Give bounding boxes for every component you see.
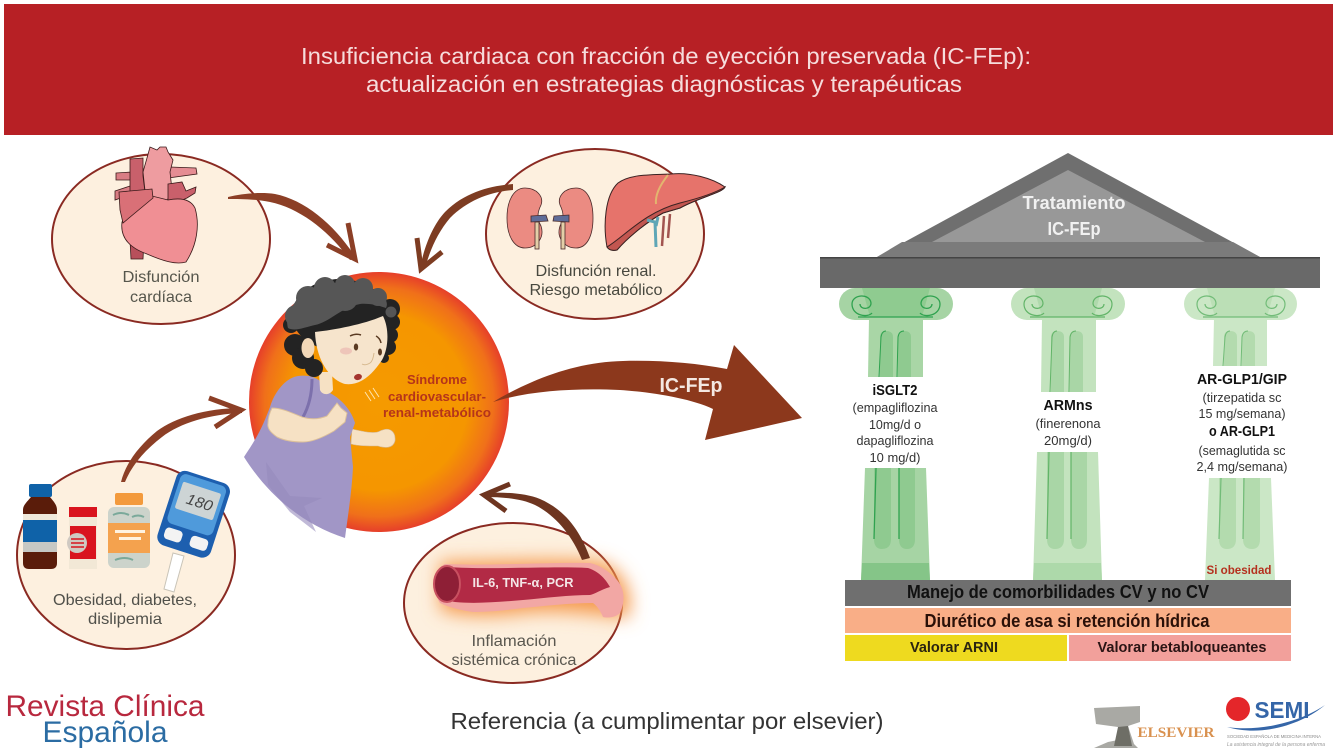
logo: Revista Clínica Española: Española xyxy=(42,716,168,749)
central circle: cardiovascular-renal-metabolic syndrome xyxy=(249,272,509,532)
ear xyxy=(302,338,314,358)
base: ARNI: Valorar ARNI xyxy=(910,639,998,656)
lower shaft xyxy=(1205,478,1275,580)
icon: glucose meter: 180 xyxy=(184,491,216,515)
icon: liver xyxy=(605,174,725,250)
base: comorbidities xyxy=(845,580,1291,606)
pillar label: (semaglutida sc xyxy=(1198,443,1286,458)
base: comorbidities: Manejo de comorbilidades CV y no CV xyxy=(907,582,1209,602)
label: Disfunción cardíaca xyxy=(122,269,200,306)
pillar: AR-GLP1 xyxy=(1184,288,1297,580)
pillar: iSGLT2 xyxy=(839,288,953,580)
pillar label: 20mg/d) xyxy=(1044,433,1092,448)
arrow: inflammation to syndrome xyxy=(484,484,590,560)
pillar label: (empagliflozina xyxy=(852,400,938,415)
pillar label: (finerenona xyxy=(1036,416,1101,431)
panel: cardiac dysfunction xyxy=(52,147,270,324)
pillar label: AR-GLP1/GIP xyxy=(1197,371,1287,388)
base: loop diuretic xyxy=(845,608,1291,633)
title text: actualización en estrategias diagnósticas y terapéuticas xyxy=(366,71,962,97)
label: Obesidad, diabetes, dislipemia: Obesidad, diabetes, xyxy=(53,592,197,609)
logo: Elsevier: ELSEVIER xyxy=(1138,725,1215,741)
base: beta blockers: Valorar betabloqueantes xyxy=(1098,639,1266,656)
temple: treatment IC-FEp xyxy=(820,153,1320,661)
label: Obesidad, diabetes, dislipemia xyxy=(53,592,197,628)
base: loop diuretic: Diurético de asa si retención hídrica xyxy=(924,611,1210,631)
near arm xyxy=(268,403,347,442)
pillar label xyxy=(852,382,938,465)
cheek xyxy=(340,348,352,354)
icon: blue bottle xyxy=(23,484,57,569)
breath marks xyxy=(365,388,379,401)
logo: SEMI: La asistencia integral de la persona enferma xyxy=(1227,742,1325,748)
tree xyxy=(1094,706,1140,748)
label: Inflamación sistémica crónica xyxy=(452,633,577,669)
icon: heart xyxy=(115,147,197,263)
syndrome label xyxy=(383,372,491,420)
eyes and eyebrows xyxy=(350,334,382,356)
nose xyxy=(362,353,374,365)
label: Disfunción renal. Riesgo metabólico: Disfunción renal. xyxy=(536,263,656,280)
pillar label: o AR-GLP1 xyxy=(1209,423,1275,440)
lower shaft xyxy=(1033,452,1102,580)
syndrome label: cardiovascular- xyxy=(388,389,486,404)
label: Inflamación sistémica crónica: sistémica crónica xyxy=(452,652,577,669)
vessel label: IL-6, TNF-α, PCR xyxy=(472,575,574,590)
logo: SEMI: SEMI xyxy=(1254,697,1310,723)
syndrome label: renal-metabólico xyxy=(383,405,491,420)
icon: glucose meter xyxy=(155,469,232,560)
label: Obesidad, diabetes, dislipemia: dislipemia xyxy=(88,611,162,628)
upper shaft xyxy=(868,318,923,377)
big arrow: IC-FEp xyxy=(493,345,802,440)
base: beta blockers xyxy=(1069,635,1291,661)
dress shading xyxy=(266,462,322,532)
pillar label: 2,4 mg/semana) xyxy=(1196,459,1288,474)
label: Disfunción cardíaca: Disfunción xyxy=(122,269,200,286)
grey hair xyxy=(285,275,396,330)
pillar label: iSGLT2 xyxy=(872,382,918,399)
pillar label: 15 mg/semana) xyxy=(1198,406,1286,421)
logo: Revista Clínica Española xyxy=(6,690,205,749)
label: Disfunción renal. Riesgo metabólico: Riesgo metabólico xyxy=(530,282,663,299)
capital xyxy=(1011,288,1125,320)
capital xyxy=(1184,288,1297,320)
capital xyxy=(839,288,953,320)
dress xyxy=(244,376,355,538)
title text xyxy=(301,43,1031,97)
icon: kidneys xyxy=(507,188,593,249)
icon: inflamed blood vessel xyxy=(434,560,630,618)
reference text: Referencia (a cumplimentar por elsevier) xyxy=(450,708,884,734)
panel: chronic systemic inflammation xyxy=(404,523,630,683)
pillar: ARMns xyxy=(1011,288,1125,580)
syndrome label: Síndrome xyxy=(407,372,467,387)
title banner xyxy=(4,4,1333,135)
panel: renal and metabolic dysfunction xyxy=(486,149,725,319)
icon: pill jar xyxy=(108,493,150,568)
face xyxy=(315,316,387,384)
label: Disfunción renal. Riesgo metabólico xyxy=(530,263,663,299)
pediment label: IC-FEp xyxy=(1048,219,1100,239)
logo: SEMI xyxy=(1226,697,1325,748)
pillar label: 10mg/d o xyxy=(869,417,921,432)
icon: test strip xyxy=(164,553,184,592)
arrow: cardiac to syndrome xyxy=(228,193,356,260)
pillar label: 10 mg/d) xyxy=(870,450,920,465)
logo: SEMI: SOCIEDAD ESPAÑOLA DE MEDICINA INTERNA xyxy=(1227,733,1321,739)
dark hair curls xyxy=(283,279,400,377)
pillar label xyxy=(1196,371,1288,474)
neck xyxy=(319,372,333,394)
pillar label: (tirzepatida sc xyxy=(1202,390,1282,405)
arrow: obesity to syndrome xyxy=(121,398,242,482)
entablature xyxy=(820,257,1320,288)
panel: obesity, diabetes, dyslipidemia xyxy=(17,461,235,649)
far arm xyxy=(351,429,395,447)
title text: Insuficiencia cardiaca con fracción de eyección preservada (IC-FEp): xyxy=(301,43,1031,69)
label: Disfunción cardíaca: cardíaca xyxy=(130,289,192,306)
arrow label: IC-FEp xyxy=(660,375,722,397)
logo: Revista Clínica Española: Revista Clínica xyxy=(6,690,205,723)
pediment label xyxy=(1022,193,1126,239)
strap xyxy=(303,379,312,417)
logo: Elsevier xyxy=(1094,706,1215,748)
upper shaft xyxy=(1213,318,1267,366)
mouth xyxy=(353,373,363,381)
arrow: renal to syndrome xyxy=(417,184,513,269)
pillar label: ARMns xyxy=(1044,397,1092,414)
icon: red bottle xyxy=(67,507,97,569)
pillar label: dapagliflozina xyxy=(856,433,934,448)
obesity note: Si obesidad xyxy=(1206,563,1272,577)
base: ARNI xyxy=(845,635,1067,661)
upper shaft xyxy=(1041,318,1096,392)
pillar label xyxy=(1036,397,1101,448)
lower shaft xyxy=(861,468,930,580)
label: Inflamación sistémica crónica: Inflamación xyxy=(472,633,556,650)
illustration: woman with chest pain xyxy=(244,275,400,538)
pediment xyxy=(877,153,1260,257)
pediment label: Tratamiento xyxy=(1022,193,1126,213)
